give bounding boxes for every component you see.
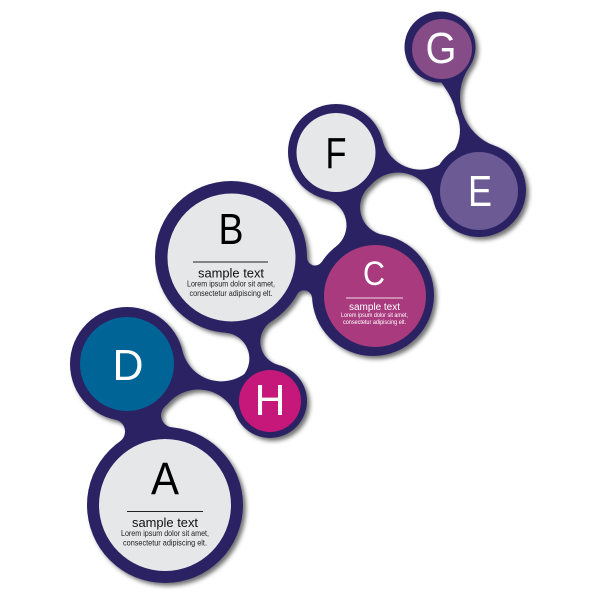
node G — [412, 19, 472, 79]
node D — [80, 317, 174, 411]
node A: sample text — [132, 516, 199, 530]
node B: consectetur adipiscing elt. — [190, 289, 272, 298]
node A: consectetur adipiscing elt. — [123, 538, 207, 548]
node G: G — [426, 24, 456, 73]
node F — [296, 113, 376, 192]
node A: A — [151, 453, 179, 504]
node B — [168, 194, 296, 322]
node A — [99, 439, 231, 571]
node A: Lorem ipsum dolor sit amet, — [121, 529, 209, 538]
node E: E — [468, 167, 492, 216]
node C: sample text — [349, 301, 400, 313]
node B: sample text — [198, 266, 265, 280]
node D: D — [112, 341, 144, 390]
node B: Lorem ipsum dolor sit amet, — [187, 280, 275, 288]
node H — [239, 370, 301, 432]
node F: F — [326, 129, 346, 178]
node C — [324, 245, 426, 347]
node E — [440, 152, 518, 230]
node C: Lorem ipsum dolor sit amet, — [341, 312, 408, 319]
node H: H — [254, 376, 286, 425]
node C: C — [363, 255, 385, 293]
node C: consectetur adipiscing elt. — [343, 319, 406, 326]
node B: B — [218, 205, 244, 254]
network frame: connected dark circles — [70, 12, 526, 583]
